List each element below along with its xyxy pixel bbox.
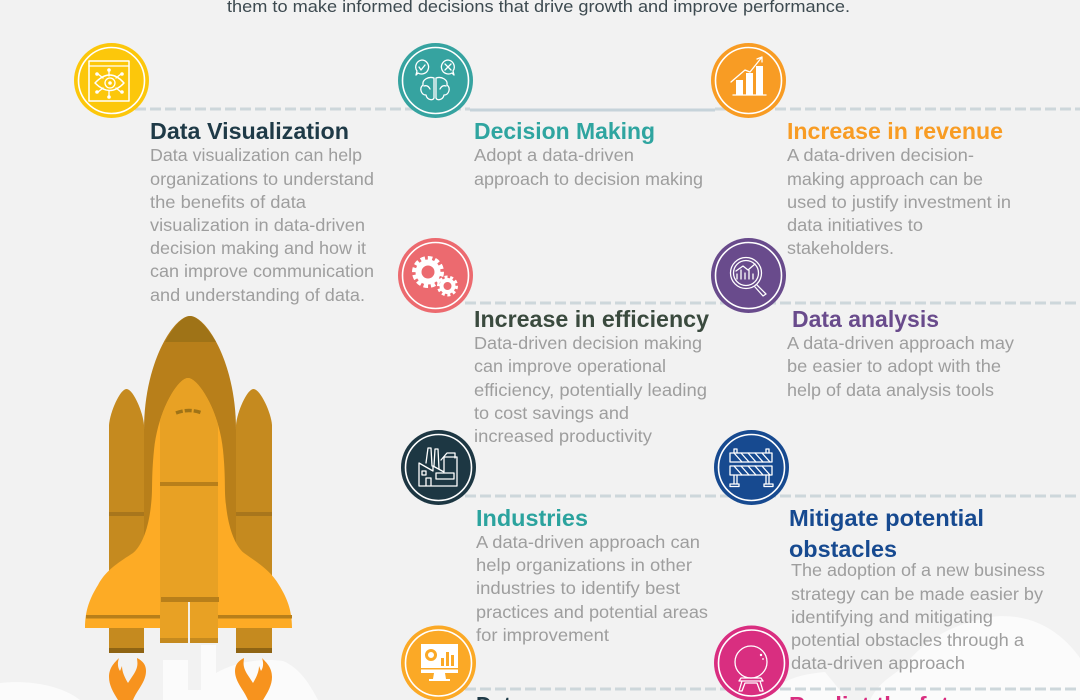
centre panel <box>160 370 218 643</box>
icon: magnifier over chart <box>711 238 786 313</box>
body text: industries to identify best <box>476 578 680 598</box>
heading: Increase in revenue <box>787 118 1003 144</box>
body text <box>787 333 1014 400</box>
body text <box>787 145 1011 258</box>
panel: predict the future (cropped) <box>714 626 986 700</box>
panel: industries <box>401 430 708 645</box>
background clouds <box>0 616 1080 700</box>
body text: can improve operational <box>474 356 666 376</box>
body text: Data-driven decision making <box>474 333 702 353</box>
panel: data visualization <box>74 43 374 305</box>
body text: data-driven approach <box>791 653 965 673</box>
body text: making approach can be <box>787 169 983 189</box>
body text: strategy can be made easier by <box>791 584 1043 604</box>
body text: and understanding of data. <box>150 285 365 305</box>
icon: factory <box>401 430 476 505</box>
body text: identifying and mitigating <box>791 607 993 627</box>
heading: Mitigate potential <box>789 505 984 531</box>
side boosters <box>109 389 272 653</box>
body text <box>474 145 703 189</box>
main tank <box>144 316 236 570</box>
body text <box>791 560 1045 673</box>
heading: Data analysis <box>792 306 939 332</box>
body text: for improvement <box>476 625 609 645</box>
body text <box>476 532 708 645</box>
body text: Data visualization can help <box>150 145 362 165</box>
panel: data analysis <box>711 238 1014 400</box>
body text: be easier to adopt with the <box>787 356 1001 376</box>
body text: the benefits of data <box>150 192 306 212</box>
wing bands <box>86 615 292 618</box>
body text: potential obstacles through a <box>791 630 1024 650</box>
icon: eye on screen <box>74 43 149 118</box>
body text: practices and potential areas <box>476 602 708 622</box>
body text <box>474 333 707 446</box>
icon: road barrier <box>714 430 789 505</box>
flames <box>109 658 272 700</box>
body text: stakeholders. <box>787 238 894 258</box>
shuttle body <box>85 378 292 628</box>
body text: used to justify investment in <box>787 192 1011 212</box>
body text: efficiency, potentially leading <box>474 380 707 400</box>
body text: A data-driven approach can <box>476 532 700 552</box>
cockpit windows <box>176 410 202 413</box>
panel: increase in revenue <box>711 43 1011 258</box>
heading: Decision Making <box>474 118 655 144</box>
icon: monitor dashboard <box>401 626 476 700</box>
body text: A data-driven decision- <box>787 145 974 165</box>
rocket illustration <box>85 316 292 700</box>
body text: can improve communication <box>150 261 374 281</box>
body text: decision making and how it <box>150 238 366 258</box>
body text: help of data analysis tools <box>787 380 994 400</box>
heading <box>789 505 984 562</box>
icon: brain with choices <box>398 43 473 118</box>
heading: obstacles <box>789 536 897 562</box>
panel: decision making <box>398 43 703 189</box>
body text: organizations to understand <box>150 169 374 189</box>
icon: crystal ball <box>714 626 789 700</box>
body text: approach to decision making <box>474 169 703 189</box>
icon: gears <box>398 238 473 313</box>
body text <box>150 145 374 305</box>
panel: mitigate potential obstacles <box>714 430 1045 673</box>
heading: Data Visualization <box>150 118 349 144</box>
body text: to cost savings and <box>474 403 629 423</box>
heading: Increase in efficiency <box>474 306 709 332</box>
heading: Industries <box>476 505 588 531</box>
icon: rising bar chart <box>711 43 786 118</box>
panel: data (cropped) <box>401 626 524 700</box>
body text: A data-driven approach may <box>787 333 1014 353</box>
panel: increase in efficiency <box>398 238 709 446</box>
body text: data initiatives to <box>787 215 923 235</box>
body text: increased productivity <box>474 426 652 446</box>
body text: The adoption of a new business <box>791 560 1045 580</box>
body text: help organizations in other <box>476 555 692 575</box>
body text: visualization in data-driven <box>150 215 365 235</box>
body text: Adopt a data-driven <box>474 145 634 165</box>
